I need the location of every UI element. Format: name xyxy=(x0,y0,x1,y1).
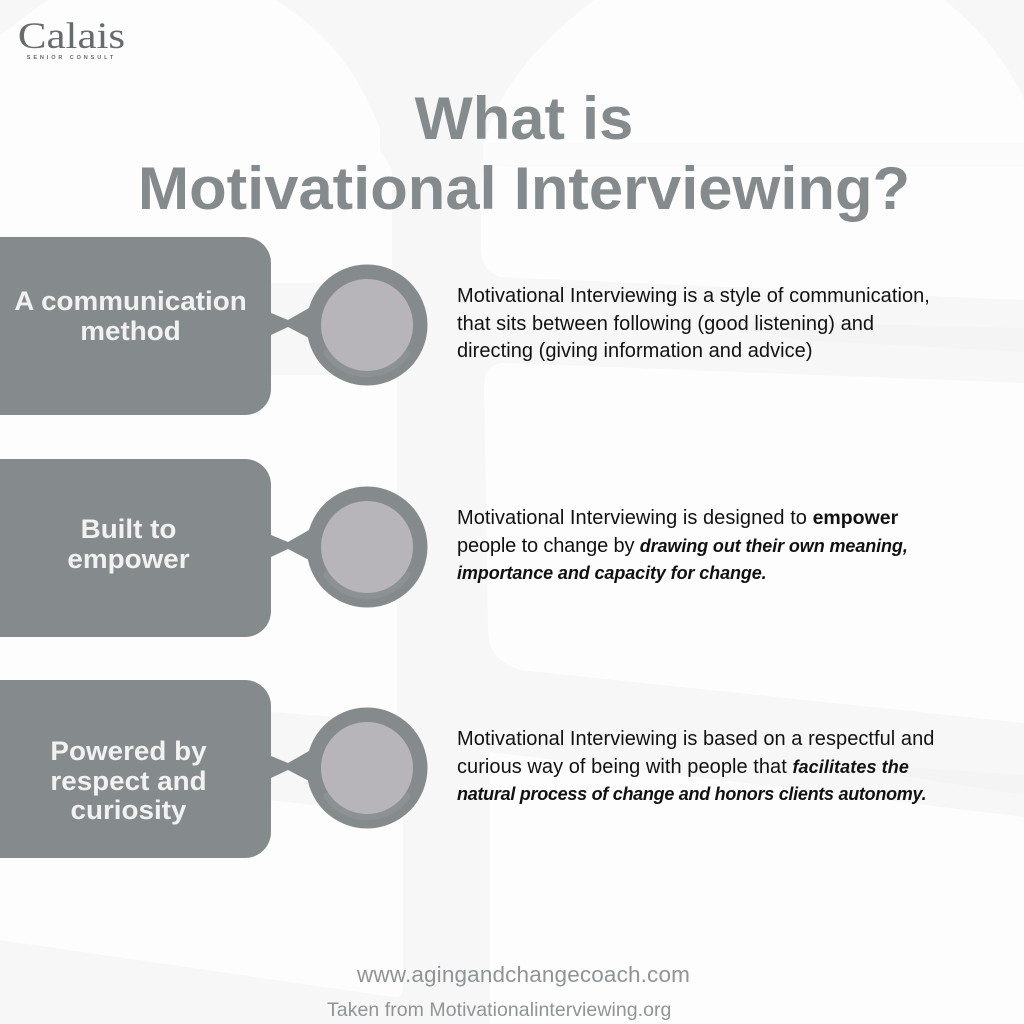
description: natural process of change and honors clients autonomy. xyxy=(457,784,926,804)
logo: Calais Senior Consult: Calais xyxy=(18,16,125,57)
logo: Calais Senior Consult: SENIOR CONSULT xyxy=(27,55,116,61)
label text: respect and xyxy=(50,766,207,796)
description: that sits between following (good listening) and xyxy=(457,312,874,334)
connector and circle icon xyxy=(271,264,428,386)
description xyxy=(457,285,930,362)
label panel xyxy=(0,680,271,858)
label text: Built to xyxy=(81,514,176,544)
source note: Taken from Motivationalinterviewing.org xyxy=(327,999,671,1021)
description: people to change by drawing out their own meaning, xyxy=(457,534,908,556)
label text: curiosity xyxy=(71,795,186,825)
label text xyxy=(67,514,190,574)
label text xyxy=(50,736,207,825)
title xyxy=(138,85,910,222)
label text: Powered by xyxy=(50,736,207,766)
description: Motivational Interviewing is a style of communication, xyxy=(457,285,930,307)
label panel xyxy=(0,459,271,637)
title: Motivational Interviewing? xyxy=(138,155,910,222)
connector and circle icon xyxy=(271,486,428,608)
description: Motivational Interviewing is based on a respectful and xyxy=(457,728,934,750)
description: curious way of being with people that facilitates the xyxy=(457,756,909,778)
label panel xyxy=(0,237,271,415)
description: Motivational Interviewing is designed to empower xyxy=(457,507,898,529)
description: importance and capacity for change. xyxy=(457,563,767,583)
label text: empower xyxy=(67,544,190,574)
label text xyxy=(14,286,247,346)
description xyxy=(457,728,934,804)
description: directing (giving information and advice) xyxy=(457,340,813,362)
label text: method xyxy=(80,316,181,346)
label text: A communication xyxy=(14,286,247,316)
row 3: powered by respect and curiosity xyxy=(0,680,934,858)
row 1: a communication method xyxy=(0,237,930,415)
row 2: built to empower xyxy=(0,459,908,637)
description xyxy=(457,507,908,583)
website url: www.agingandchangecoach.com xyxy=(357,962,690,987)
title: What is xyxy=(415,85,633,152)
connector and circle icon xyxy=(271,708,428,828)
